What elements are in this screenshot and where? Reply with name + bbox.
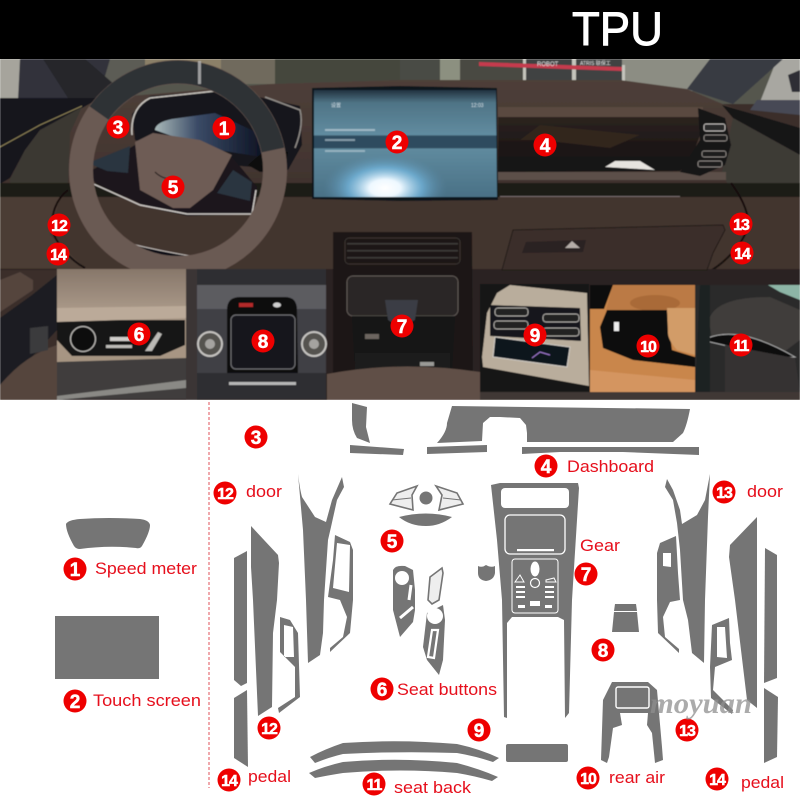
part 2: touch screen film bbox=[55, 616, 201, 713]
part 1: speed meter film bbox=[64, 518, 197, 581]
marker 10 lower: 10 bbox=[580, 771, 597, 788]
title bar: TPU bbox=[572, 2, 663, 55]
marker 10: 10 bbox=[640, 339, 657, 356]
part 1: speed meter film: Speed meter bbox=[95, 559, 197, 578]
marker 11 lower: 11 bbox=[367, 777, 383, 794]
marker 5 bbox=[162, 176, 184, 199]
part 4: dashboard film bbox=[427, 406, 699, 478]
inset: seat back bbox=[695, 285, 800, 392]
part 5: steering wheel films bbox=[380, 486, 463, 553]
part 8: small vent film bbox=[592, 604, 639, 662]
marker 6 bbox=[128, 322, 150, 346]
marker 4 lower bbox=[534, 454, 558, 478]
marker 10 bbox=[636, 334, 660, 358]
marker 11 bbox=[730, 334, 752, 356]
inset: rear armrest console bbox=[590, 285, 695, 392]
marker 14 top: 14 bbox=[50, 247, 67, 264]
dashed divider bbox=[208, 402, 210, 788]
marker 11 lower bbox=[362, 772, 386, 796]
part 7: gear console film: Gear bbox=[580, 536, 620, 555]
marker 8: 8 bbox=[258, 332, 268, 353]
marker 12 upper: 12 bbox=[217, 486, 234, 503]
marker 4 bbox=[534, 134, 556, 157]
part 14: right pedal films: pedal bbox=[741, 773, 784, 792]
watermark: moyuan bbox=[650, 687, 752, 720]
marker 12 top bbox=[48, 214, 70, 236]
marker 14 lower right: 14 bbox=[709, 772, 726, 789]
marker 6: 6 bbox=[134, 325, 144, 346]
part 14: right pedal films bbox=[706, 548, 784, 792]
marker 14 lower right bbox=[706, 768, 728, 790]
photo: car dashboard interior: ATRIS 联保工 bbox=[580, 60, 611, 67]
marker 13 mid bbox=[676, 718, 698, 742]
marker 9 bbox=[524, 324, 546, 347]
title bar bbox=[0, 0, 800, 59]
marker 3 lower: 3 bbox=[251, 428, 261, 449]
marker 1: 1 bbox=[219, 119, 230, 140]
marker 6 lower: 6 bbox=[377, 680, 387, 701]
marker 5: 5 bbox=[168, 178, 179, 199]
marker 14 lower left bbox=[218, 768, 240, 792]
part 6: seat button films bbox=[370, 566, 497, 701]
marker 13 upper: 13 bbox=[716, 485, 733, 502]
marker 8 lower: 8 bbox=[598, 641, 608, 662]
part 11: seat back films bbox=[309, 741, 499, 797]
inset: seat control buttons bbox=[57, 269, 186, 400]
photo: car dashboard interior: ROBOT bbox=[537, 62, 559, 68]
marker 7 bbox=[390, 314, 414, 338]
part 2: touch screen film: Touch screen bbox=[93, 691, 201, 710]
part 10: rear air film bbox=[576, 682, 665, 790]
marker 8 bbox=[252, 330, 274, 353]
part 14: left pedal films: pedal bbox=[248, 767, 291, 786]
marker 14 lower left: 14 bbox=[221, 773, 238, 790]
marker 2 lower: 2 bbox=[70, 692, 80, 713]
marker 5 lower: 5 bbox=[387, 532, 398, 553]
marker 14 top bbox=[46, 242, 70, 266]
marker 9 lower bbox=[468, 718, 490, 742]
part 13: right door films bbox=[657, 474, 783, 742]
marker 13 top: 13 bbox=[733, 217, 750, 234]
part 6: seat button films: Seat buttons bbox=[397, 680, 497, 699]
marker 12 mid bbox=[258, 716, 280, 740]
part 12: left door films bbox=[214, 474, 353, 740]
part 11: seat back films: seat back bbox=[394, 778, 472, 797]
marker 2: 2 bbox=[392, 133, 402, 154]
marker 11: 11 bbox=[734, 338, 750, 355]
marker 2 lower bbox=[64, 690, 86, 713]
inset: rear touch control panel bbox=[197, 269, 326, 399]
part 14: left pedal films bbox=[218, 551, 291, 792]
marker 14 top right: 14 bbox=[734, 246, 751, 263]
marker 2 bbox=[386, 130, 408, 154]
marker 12 top: 12 bbox=[51, 218, 68, 235]
marker 4: 4 bbox=[540, 136, 551, 157]
marker 13 upper bbox=[712, 480, 736, 504]
part 10: rear air film: rear air bbox=[609, 768, 665, 787]
part 3: left dash pieces bbox=[244, 403, 404, 455]
marker 7 lower: 7 bbox=[581, 565, 591, 586]
marker 13 top bbox=[730, 212, 752, 236]
photo: car dashboard interior bbox=[0, 59, 800, 400]
marker 12 upper bbox=[214, 482, 236, 504]
marker 7: 7 bbox=[397, 317, 407, 338]
marker 12 mid: 12 bbox=[261, 721, 278, 738]
marker 4 lower: 4 bbox=[541, 457, 552, 478]
inset: rear air vents bbox=[480, 284, 589, 393]
part 4: dashboard film: Dashboard bbox=[567, 457, 654, 476]
marker 9 lower: 9 bbox=[474, 721, 484, 742]
part 13: right door films: door bbox=[747, 482, 783, 501]
photo: car dashboard interior: 设置 bbox=[331, 102, 341, 109]
marker 1 bbox=[212, 116, 236, 140]
marker 1 lower: 1 bbox=[70, 560, 81, 581]
marker 7 lower bbox=[574, 562, 598, 586]
marker 13 mid: 13 bbox=[679, 723, 696, 740]
part 7: gear console film bbox=[478, 483, 620, 762]
photo: car dashboard interior: 12:03 bbox=[471, 103, 484, 109]
marker 14 top right bbox=[730, 242, 754, 264]
marker 9: 9 bbox=[530, 326, 540, 347]
marker 3 lower bbox=[244, 426, 268, 449]
marker 3: 3 bbox=[113, 118, 123, 139]
marker 3 bbox=[106, 116, 130, 139]
part 12: left door films: door bbox=[246, 482, 282, 501]
